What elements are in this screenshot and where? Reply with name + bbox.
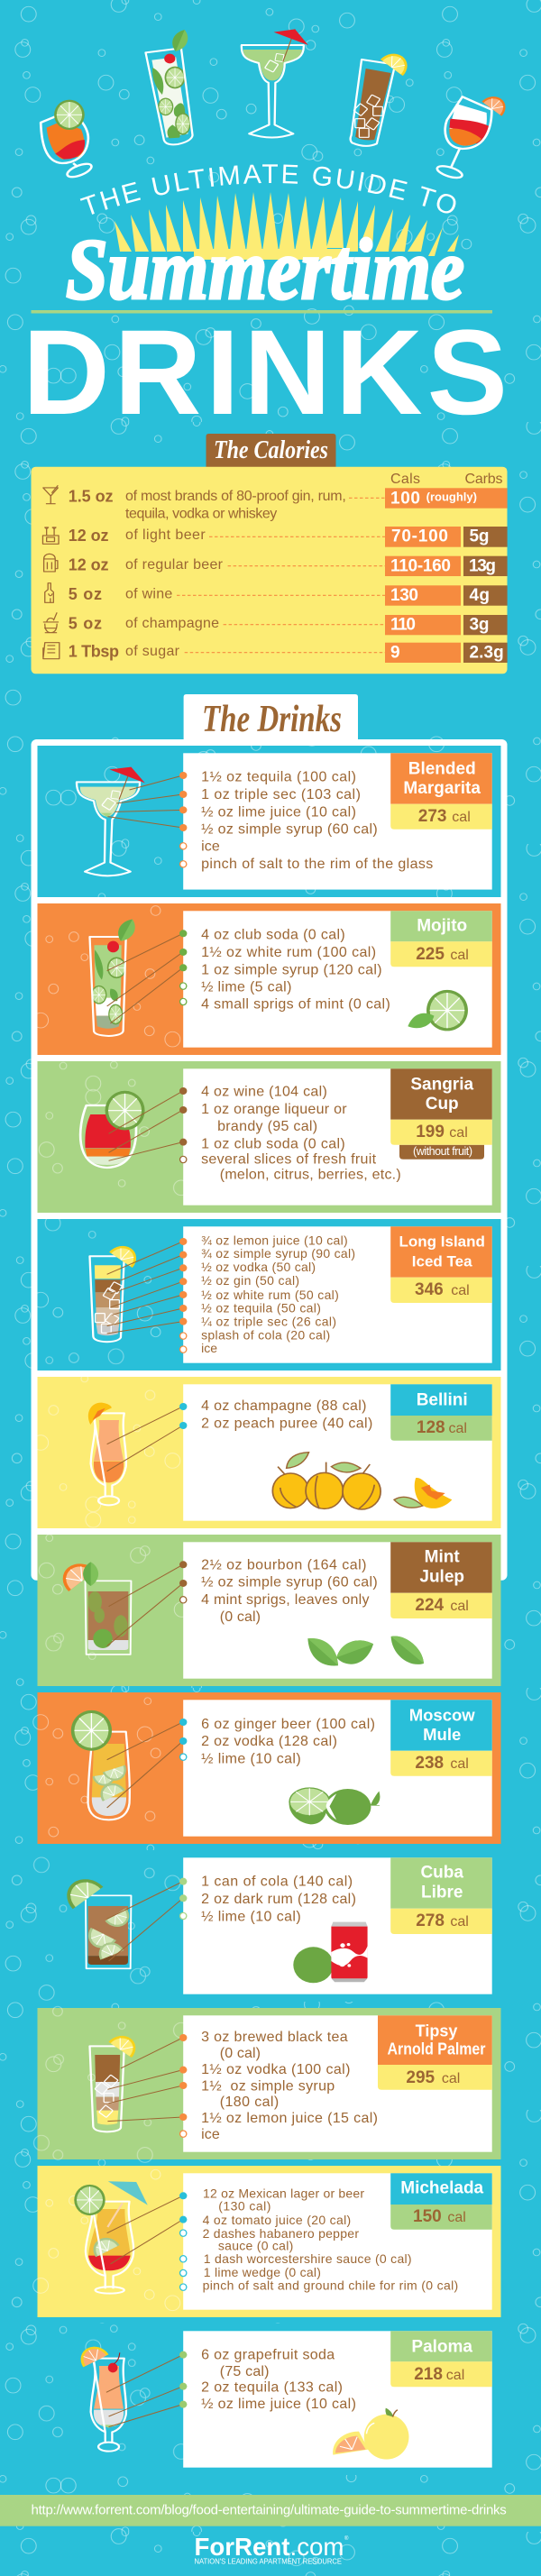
title badge: Julep: [419, 1567, 464, 1586]
row: 1 Tbsp sugar: 9: [390, 643, 400, 662]
row: 5 oz wine: [69, 585, 508, 606]
title badge: [390, 1384, 492, 1441]
illustration: mojito glass: [90, 916, 140, 1036]
title badge: [390, 1857, 492, 1934]
illustration: mint julep glass: [55, 1557, 131, 1655]
ingredients: ½ lime (5 cal): [201, 979, 291, 995]
title badge: Arnold Palmer: [388, 2040, 485, 2058]
title badge: cal: [450, 1756, 469, 1772]
title badge: Cup: [426, 1095, 459, 1114]
title word: DRINKS: DRINKS: [23, 306, 508, 440]
title badge: cal: [446, 2368, 464, 2383]
title badge: Sangria: [410, 1075, 473, 1094]
sun rays: [115, 192, 459, 260]
panel: Long Island Iced Tea: [33, 1215, 501, 1371]
title badge: Mule: [423, 1725, 461, 1744]
title badge: Tipsy: [416, 2021, 457, 2040]
icon: mojito glass: [145, 28, 193, 144]
ingredients: 2 oz vodka (128 cal): [201, 1734, 337, 1749]
bubbles: [33, 1215, 160, 1364]
title badge: 218: [414, 2365, 443, 2384]
icon: iced tea glass: [351, 49, 414, 146]
column headers: Carbs: [465, 472, 503, 487]
panel: Moscow Mule: [33, 1692, 501, 1844]
row: 5 oz champagne: 110: [390, 616, 416, 635]
row: 12 oz light beer: 70-100: [391, 527, 448, 546]
heading: The Calories: The Calories: [214, 435, 328, 464]
ingredients: [203, 2186, 458, 2293]
panel: Mint Julep: [38, 1535, 501, 1686]
illustration: michelada glass: [74, 2181, 148, 2294]
title badge: cal: [452, 810, 471, 825]
ingredients: 1 oz triple sec (103 cal): [201, 787, 361, 802]
logo: ForRent.com: ®: [344, 2535, 349, 2542]
ingredients: 1 oz simple syrup (120 cal): [201, 962, 382, 977]
illustration: moscow mule glass: [71, 1710, 130, 1820]
ingredients: 2 oz dark rum (128 cal): [201, 1892, 356, 1907]
panel: Bellini: [33, 1375, 501, 1528]
ingredients: ice: [201, 1341, 217, 1355]
title badge: cal: [450, 1914, 469, 1930]
ingredients: [201, 928, 390, 1013]
ingredient leader lines: [107, 2034, 187, 2137]
ingredients: ice: [201, 839, 220, 855]
bubbles: [39, 2325, 188, 2459]
ingredients: 4 small sprigs of mint (0 cal): [201, 997, 390, 1013]
title badge: 346: [415, 1280, 444, 1299]
row: 12 oz regular beer: [69, 556, 508, 576]
row: 5 oz champagne: [69, 614, 508, 635]
bubbles: [34, 1857, 180, 2000]
ingredients: 2½ oz bourbon (164 cal): [201, 1558, 366, 1573]
panel: Sangria Cup: [38, 1061, 501, 1213]
row: 5 oz wine: 4g: [469, 586, 490, 605]
ingredients: splash of cola (20 cal): [201, 1327, 330, 1342]
title badge: cal: [450, 948, 469, 963]
title badge: Blended: [408, 759, 476, 778]
outer white panel: [31, 739, 507, 1581]
ingredients: sauce (0 cal): [218, 2238, 293, 2252]
title badge: [390, 1226, 492, 1303]
ingredients: several slices of fresh fruit: [201, 1151, 377, 1167]
ingredients: 1 dash worcestershire sauce (0 cal): [204, 2251, 412, 2266]
panel: Michelada: [33, 2166, 501, 2317]
row: 12 oz light beer: 12 oz: [69, 527, 108, 545]
row: 1.5 oz spirits: of most brands of 80-proof gin, rum,: [125, 489, 346, 504]
title line: The Ultimate Guide To: THE ULTIMATE GUIDE TO: [79, 164, 456, 215]
row: 1 Tbsp sugar: of sugar: [125, 644, 180, 659]
ingredient leader lines: [107, 1238, 187, 1352]
footer band with URL: http://www.forrent.com/blog/food-entertaining/ultimate-guide-to-summertime-drinks: [31, 2502, 507, 2517]
ingredients: 2 oz tequila (133 cal): [201, 2380, 343, 2396]
illustration: cuba libre glass: [59, 1872, 134, 1968]
title badge: cal: [450, 1599, 469, 1614]
title badge: [390, 911, 492, 967]
ingredients: [201, 2030, 378, 2142]
title badge: (without fruit): [413, 1145, 472, 1158]
row: 1 Tbsp sugar: [69, 642, 508, 663]
logo: ForRent.com: NATION'S LEADING APARTMENT RESOURCE: [195, 2557, 342, 2566]
title badge: 295: [406, 2068, 436, 2087]
illustration: lime and cola can: [293, 1922, 368, 1983]
title badge: [390, 1700, 492, 1776]
ingredients: 1 oz orange liqueur or: [201, 1102, 347, 1117]
title badge: Libre: [421, 1883, 463, 1902]
bubbles: [34, 2006, 188, 2162]
panel: Mojito: [33, 903, 501, 1055]
title word: Summertime: Summertime: [66, 221, 464, 317]
title badge: cal: [447, 2210, 466, 2225]
row: 1 Tbsp sugar: 1 Tbsp: [69, 642, 119, 660]
title badge: 224: [415, 1596, 445, 1615]
ingredients: 2 dashes habanero pepper: [203, 2226, 359, 2241]
illustration: limes: [289, 1788, 380, 1825]
title badge: 238: [415, 1754, 444, 1773]
title badge: 225: [416, 945, 445, 964]
ingredients: (melon, citrus, berries, etc.): [220, 1168, 401, 1183]
ingredients: 6 oz grapefruit soda: [201, 2348, 335, 2363]
illustration: grapefruit: [333, 2408, 408, 2460]
title badge: 128: [417, 1418, 445, 1437]
row: 12 oz light beer: [69, 527, 508, 547]
illustration: peaches: [272, 1453, 452, 1509]
ingredients: ice: [201, 2127, 220, 2142]
bubbles: [33, 906, 180, 1047]
ingredient leader lines: [107, 930, 187, 1023]
ingredients: ½ oz gin (50 cal): [201, 1273, 299, 1288]
icon: margarita glass: [242, 29, 308, 137]
ingredients: [201, 770, 433, 872]
bubbles: [33, 2169, 180, 2311]
bubbles: [39, 1061, 188, 1196]
row: 12 oz light beer: 5g: [469, 527, 489, 546]
ingredient leader lines: [109, 1087, 187, 1163]
ingredients: 6 oz ginger beer (100 cal): [201, 1717, 375, 1732]
title badge: cal: [449, 1421, 467, 1436]
ingredients: 1½ oz simple syrup: [201, 2078, 335, 2094]
panel: Paloma: [38, 2324, 501, 2475]
bubbles: [33, 1698, 160, 1837]
bubbles: [33, 1375, 180, 1527]
ingredients: [201, 1233, 355, 1355]
ingredients: ½ oz simple syrup (60 cal): [201, 822, 378, 838]
ingredient leader lines: [107, 1561, 187, 1646]
panel: calories table: [31, 467, 508, 674]
ingredients: 4 oz wine (104 cal): [201, 1084, 327, 1099]
title badge: 199: [416, 1123, 445, 1141]
icon: tropical wine glass: [41, 100, 94, 179]
title badge: [390, 2331, 492, 2387]
ingredient leader lines: [106, 2351, 187, 2427]
ingredients: ½ oz vodka (50 cal): [201, 1260, 316, 1274]
ingredients: 1½ oz white rum (100 cal): [201, 945, 376, 960]
title badge: 150: [413, 2207, 442, 2226]
ingredients: (0 cal): [220, 2046, 261, 2061]
title badge: Long Island: [399, 1233, 485, 1251]
illustration: paloma glass: [75, 2342, 126, 2452]
row: 1.5 oz spirits: [69, 488, 508, 521]
ingredients: [201, 1717, 375, 1766]
ingredients: ½ lime (10 cal): [201, 1909, 301, 1924]
ingredients: 1 can of cola (140 cal): [201, 1875, 353, 1890]
row: 5 oz champagne: of champagne: [125, 616, 219, 631]
bubbles: [39, 1535, 189, 1659]
title badge: Cuba: [420, 1864, 463, 1883]
ingredients: ½ oz tequila (50 cal): [201, 1301, 321, 1316]
title badge: [390, 1542, 492, 1618]
row: 12 oz light beer: of light beer: [125, 527, 206, 543]
ingredients: 3 oz brewed black tea: [201, 2030, 348, 2045]
ingredients: ½ lime (10 cal): [201, 1751, 301, 1766]
row: 1 Tbsp sugar: 2.3g: [469, 643, 504, 662]
ingredients: ¾ oz lemon juice (10 cal): [201, 1233, 348, 1247]
title badge: Paloma: [411, 2337, 472, 2356]
ingredients: pinch of salt and ground chile for rim (0 cal): [203, 2278, 458, 2293]
ingredients: [201, 1558, 378, 1625]
ingredients: 2 oz peach puree (40 cal): [201, 1416, 372, 1431]
logo: ForRent.com: [195, 2533, 349, 2566]
title badge: cal: [451, 1283, 470, 1298]
ingredients: [201, 1084, 401, 1183]
row: 12 oz regular beer: 13g: [469, 556, 496, 575]
ingredients: [201, 1875, 356, 1924]
title badge: [378, 2015, 492, 2090]
title badge: Bellini: [417, 1390, 468, 1409]
row: 1.5 oz spirits: (roughly): [426, 490, 477, 503]
ingredient leader lines: [107, 2192, 187, 2290]
ingredients: 1½ oz tequila (100 cal): [201, 770, 356, 785]
title rule: [31, 310, 492, 314]
title badge: Mojito: [417, 917, 467, 936]
row: 12 oz regular beer: of regular beer: [125, 557, 224, 573]
row: 12 oz regular beer: 110-160: [390, 556, 451, 575]
ingredients: brandy (95 cal): [217, 1119, 317, 1134]
ingredients: [201, 1398, 372, 1431]
ingredient leader lines: [107, 1719, 187, 1808]
row: 1.5 oz spirits: 100: [390, 489, 420, 508]
row: 5 oz wine: of wine: [125, 587, 172, 602]
row: 5 oz wine: 130: [390, 586, 418, 605]
ingredient leader lines: [107, 1878, 187, 1961]
illustration: bellini glass: [88, 1403, 126, 1505]
icon: red wine glass: [436, 92, 511, 180]
title badge: [390, 753, 492, 830]
title badge: Michelada: [400, 2179, 484, 2198]
title badge: Margarita: [403, 779, 481, 798]
illustration: mint leaves: [307, 1636, 424, 1666]
illustration: margarita glass: [77, 767, 145, 875]
ingredients: (75 cal): [220, 2364, 269, 2379]
title badge: Mint: [425, 1548, 460, 1567]
row: 5 oz wine: 5 oz: [69, 585, 102, 603]
ingredients: [201, 2348, 356, 2412]
panel: Tipsy Arnold Palmer: [34, 2006, 501, 2162]
ingredients: ¾ oz simple syrup (90 cal): [201, 1246, 355, 1260]
icons: serving types: [42, 485, 60, 659]
title badge: cal: [442, 2071, 460, 2086]
ingredients: ½ oz simple syrup (60 cal): [201, 1575, 378, 1591]
heading: The Drinks: The Drinks: [202, 699, 342, 740]
ingredients: 4 oz champagne (88 cal): [201, 1398, 366, 1414]
ingredients: 12 oz Mexican lager or beer: [203, 2186, 364, 2200]
row: 5 oz champagne: 5 oz: [69, 614, 102, 632]
ingredients: 1 oz club soda (0 cal): [201, 1136, 345, 1151]
row: 1.5 oz spirits: 1.5 oz: [69, 488, 114, 506]
title badge: [390, 2173, 492, 2230]
ingredients: 4 oz tomato juice (20 cal): [203, 2213, 351, 2227]
ingredients: (130 cal): [218, 2199, 270, 2214]
illustration: sangria glass: [80, 1091, 145, 1168]
ingredient leader lines: [107, 772, 187, 867]
ingredients: ½ oz lime juice (10 cal): [201, 2397, 356, 2412]
title badge: 278: [416, 1911, 445, 1930]
ingredients: (180 cal): [220, 2095, 279, 2110]
ingredients: ¼ oz triple sec (26 cal): [201, 1315, 336, 1329]
logo: ForRent.com: .com: [290, 2533, 344, 2561]
column headers: Cals: [390, 472, 420, 487]
ingredients: 1 lime wedge (0 cal): [204, 2265, 321, 2279]
row: 1.5 oz spirits: tequila, vodka or whiskey: [125, 506, 277, 521]
title badge: 273: [418, 807, 447, 826]
column headers: [390, 472, 503, 487]
ingredients: 1½ oz lemon juice (15 cal): [201, 2111, 378, 2126]
title badge: [390, 1068, 492, 1160]
panel: Blended Margarita: [38, 746, 501, 897]
title badge: Moscow: [409, 1705, 475, 1724]
drink icons row: [41, 28, 511, 180]
row: 5 oz champagne: 3g: [469, 616, 489, 635]
logo: ForRent.com: ForRent: [195, 2533, 290, 2561]
ingredients: ½ oz lime juice (10 cal): [201, 804, 356, 820]
illustration: arnold palmer glass: [90, 2031, 142, 2131]
ingredients: 1½ oz vodka (100 cal): [201, 2062, 350, 2077]
title badge: Iced Tea: [412, 1252, 472, 1270]
ingredients: (0 cal): [220, 1609, 261, 1625]
row: 12 oz regular beer: 12 oz: [69, 556, 108, 574]
ingredient leader lines: [107, 1403, 187, 1471]
title badge: cal: [449, 1125, 468, 1141]
ingredients: 4 mint sprigs, leaves only: [201, 1592, 370, 1608]
ingredients: pinch of salt to the rim of the glass: [201, 857, 433, 872]
ingredients: 4 oz club soda (0 cal): [201, 928, 345, 943]
illustration: iced tea glass: [90, 1241, 142, 1342]
footer band with URL: [0, 2495, 541, 2526]
ingredients: ½ oz white rum (50 cal): [201, 1288, 339, 1302]
illustration: lime and mint: [408, 990, 468, 1031]
panel: Cuba Libre: [34, 1850, 501, 2002]
